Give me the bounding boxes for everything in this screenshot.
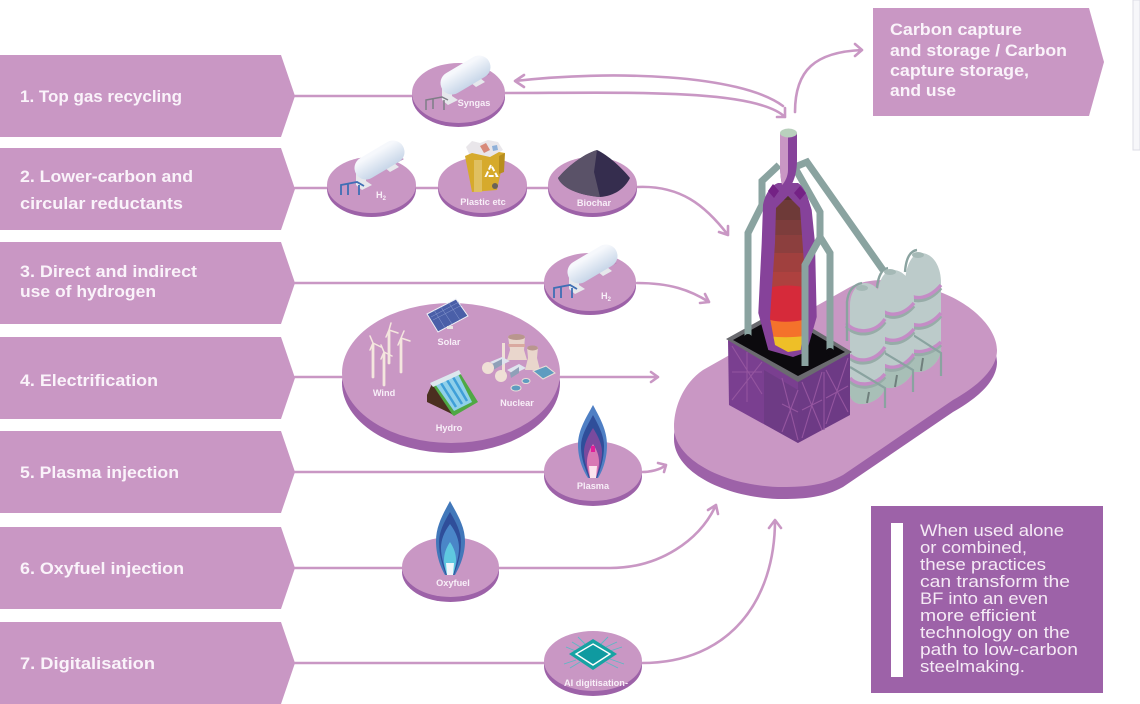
node: electrification energy sources: Hydro [436,423,463,433]
stove: back [905,250,941,376]
callout: summary text box: steelmaking. [920,657,1025,676]
icon: nuclear plant [482,334,555,391]
node: H2: H [376,190,383,200]
back pipes [744,165,834,356]
icon: syngas tank [426,67,490,110]
icon: oxyfuel flame [436,501,465,575]
callout: summary text box: more efficient [920,606,1036,625]
chevron: 2. Lower-carbon and circular reductants [0,148,295,230]
callout: carbon capture: and use [890,81,956,100]
node: H2 row 3: 2 [608,297,612,303]
callout: summary text box: can transform the [920,572,1070,591]
node: electrification energy sources: Wind [373,388,395,398]
connector lines [295,96,548,663]
stoves: three tanks [846,250,941,408]
chevron: 1. Top gas recycling [0,55,295,137]
node: plasma: Plasma [577,481,610,491]
chevron: 3. Direct and indirect use of hydrogen: 3. Direct and indirect [20,262,197,281]
icon: plasma flame [578,405,607,478]
chevron: 4. Electrification: 4. Electrification [20,371,158,390]
node: AI digitisation [544,631,642,696]
furnace interior bands [770,196,804,352]
callout: summary text box: or combined, [920,538,1027,557]
callout: summary text box [871,506,1103,693]
chevron: 7. Digitalisation: 7. Digitalisation [20,654,155,673]
chevron: 6. Oxyfuel injection [0,527,295,609]
chevron: 7. Digitalisation [0,622,295,704]
icon: biochar pile [558,150,630,197]
callout: summary text box: When used alone [920,521,1064,540]
callout: summary text box: path to low-carbon [920,640,1078,659]
callout: summary text box: BF into an even [920,589,1048,608]
node: plastic [438,140,527,217]
chevron: 5. Plasma injection: 5. Plasma injection [20,463,179,482]
icon: solar panel [427,299,468,332]
icon: microchip [564,637,624,670]
icon: hydrogen tank [341,152,404,195]
callout: carbon capture: Carbon capture [890,20,1022,39]
chevron: 5. Plasma injection [0,431,295,513]
chevron: 3. Direct and indirect use of hydrogen: use of hydrogen [20,282,156,301]
chevron: 2. Lower-carbon and circular reductants: circular reductants [20,194,183,213]
callout: carbon capture [873,8,1104,116]
icon: wind turbines [370,323,410,385]
node: H2: 2 [383,196,387,202]
node: biochar [548,150,637,217]
stove: front [846,283,885,408]
icon: hydro dam [427,370,478,416]
node: H2 row 3: H [601,291,608,301]
chevron: 6. Oxyfuel injection: 6. Oxyfuel injection [20,559,184,578]
node: oxyfuel: Oxyfuel [436,578,470,588]
node: electrification energy sources [342,299,560,453]
chevron: 1. Top gas recycling: 1. Top gas recycling [20,87,182,106]
callout: carbon capture: capture storage, [890,61,1029,80]
front pipe [805,238,820,366]
page edge [1133,0,1140,150]
node: syngas [412,63,505,127]
chevron: 3. Direct and indirect use of hydrogen [0,242,295,324]
node: plastic: Plastic etc [460,197,506,207]
long gas pipe [795,162,883,270]
node: H2 [327,152,416,217]
icon: hydrogen tank [554,256,617,298]
callout: carbon capture: and storage / Carbon [890,41,1067,60]
chevron: 2. Lower-carbon and circular reductants: 2. Lower-carbon and [20,167,193,186]
node: electrification energy sources: Nuclear [500,398,534,408]
furnace stack [780,128,797,187]
furnace tower base [726,309,852,443]
node: biochar: Biochar [577,198,612,208]
node: electrification energy sources: Solar [438,337,461,347]
node: oxyfuel [402,501,499,602]
chevron: 4. Electrification [0,337,295,419]
callout: summary text box: these practices [920,555,1046,574]
arrows to furnace [499,44,862,663]
node: AI digitisation: AI digitisation- [564,678,628,688]
node: syngas: Syngas [458,98,490,108]
node: H2 row 3 [544,253,636,315]
node: plasma [544,405,642,506]
platform [674,280,997,499]
icon: yellow recycling bin [465,140,505,192]
stove: middle [877,268,914,392]
callout: summary text box: technology on the [920,623,1070,642]
blast furnace [758,128,817,360]
